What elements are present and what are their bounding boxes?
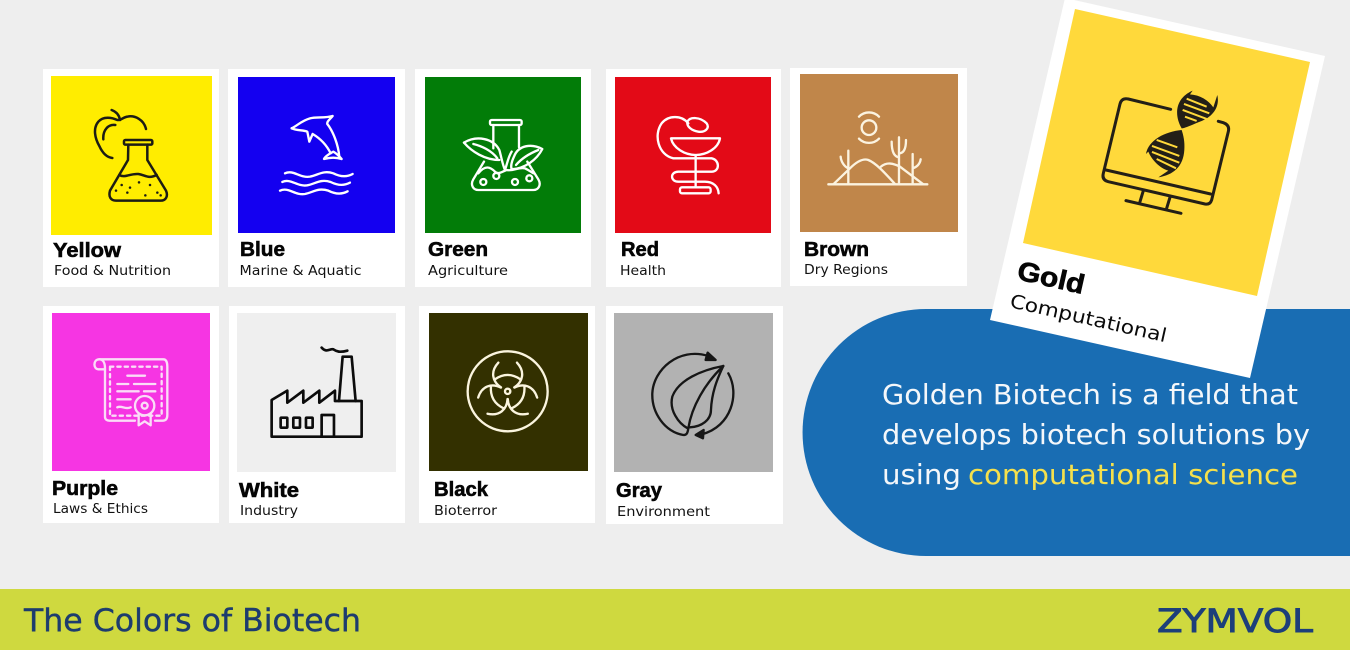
explanation text [882,378,1310,491]
label: black: Black [434,478,489,501]
icon: certificate scroll [94,359,167,425]
label: brown: Dry Regions [804,262,888,278]
label: purple: Purple [52,477,118,500]
label: gray: Gray [616,479,663,502]
label: brown: Brown [804,238,869,261]
label: gold [1008,256,1169,347]
label: green [428,238,508,279]
explanation text: using [882,458,961,491]
panel: brown card [790,68,967,286]
panel: blue card [228,69,405,287]
label: black [434,478,497,519]
label: purple: Laws & Ethics [53,501,148,517]
panel: green card [415,69,591,287]
label: gray [616,479,710,520]
label: gold: Gold [1015,256,1088,300]
label: white: Industry [240,503,298,519]
icon: dolphin and waves [280,116,353,194]
panel: white card [229,306,405,523]
label: blue: Marine & Aquatic [240,263,362,279]
panel: gray card [606,306,783,524]
panel: explanation pill [803,309,1350,556]
label: blue [240,238,362,279]
logo: ZYMVOL [1157,602,1313,640]
icon: factory [272,348,362,437]
icon: desert [828,112,927,184]
label: blue: Blue [240,238,285,261]
label: black: Bioterror [434,503,497,519]
explanation text: Golden Biotech is a field that [882,378,1298,411]
panel: black card [419,306,595,523]
icon: apple and flask [95,110,167,201]
label: purple [52,477,148,517]
icon: leaf with cycle arrows [652,353,733,438]
panel: yellow card [43,69,219,287]
panel: purple card [43,306,219,523]
title: The Colors of Biotech [23,603,361,639]
label: yellow [53,239,171,279]
panel: gold card [990,0,1325,378]
label: gold: Computational [1008,290,1169,347]
explanation text: computational science [968,458,1298,491]
label: green: Agriculture [428,263,508,279]
label: red [620,238,666,279]
icon: flask with leaves [464,120,542,190]
label: brown [804,238,888,278]
label: yellow: Food & Nutrition [54,263,171,279]
label: yellow: Yellow [53,239,121,262]
label: green: Green [428,238,488,261]
label: white: White [239,479,299,502]
label: white [239,479,299,519]
label: red: Red [621,238,659,261]
panel: red card [606,69,781,287]
icon: biohazard [468,351,548,431]
footer bar [0,589,1350,650]
label: red: Health [620,263,666,279]
label: gray: Environment [617,504,710,520]
explanation text: develops biotech solutions by [882,418,1310,451]
icon: bowl of hygieia [658,117,720,193]
icon: monitor with dna [1103,91,1229,213]
